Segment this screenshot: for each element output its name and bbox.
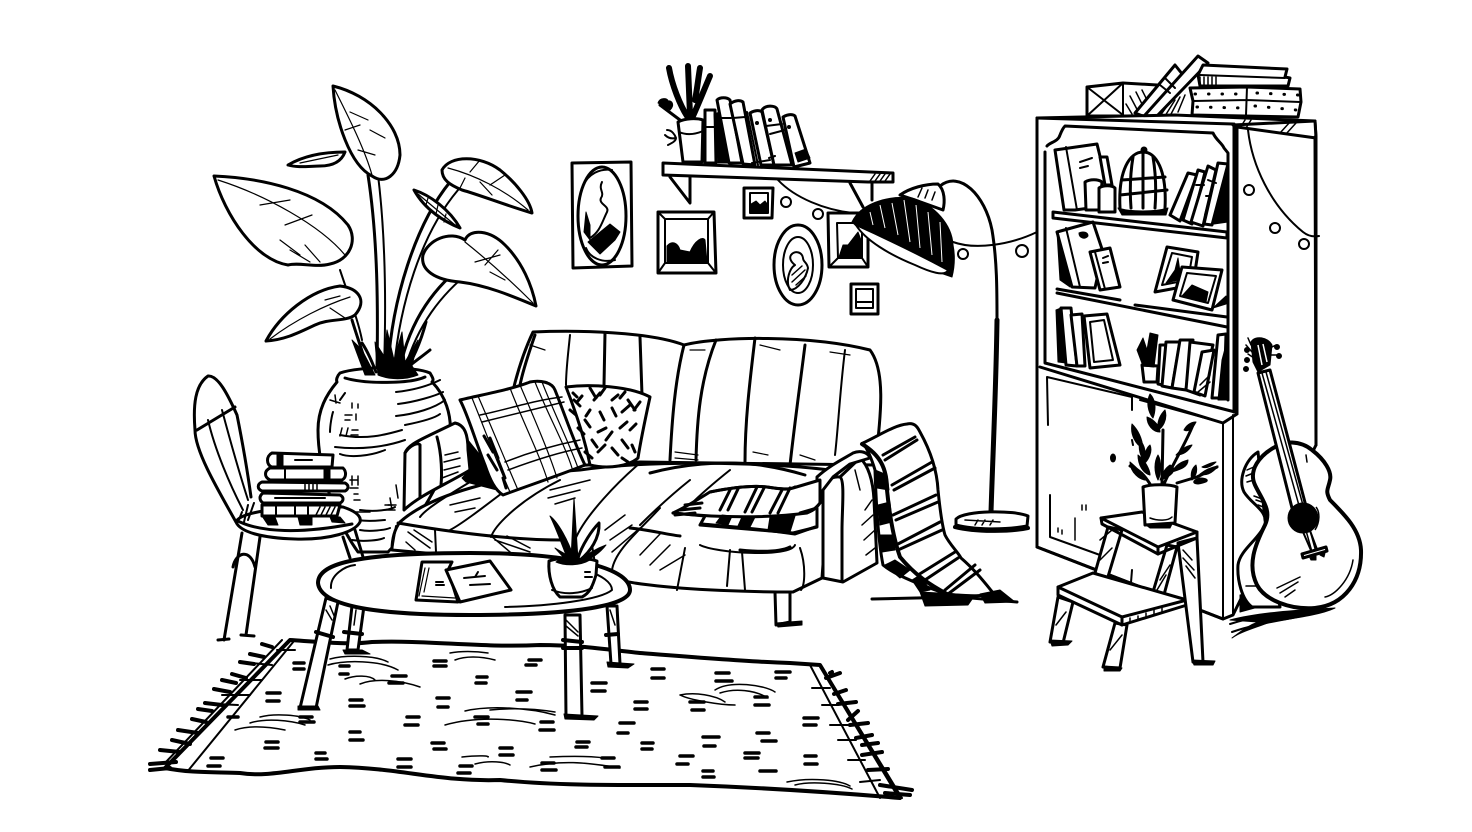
guitar side bbox=[1238, 452, 1280, 607]
potted plant bbox=[214, 86, 536, 552]
stool plant bbox=[1110, 394, 1218, 528]
leaf mid small bbox=[414, 190, 460, 228]
stool legs bbox=[1095, 527, 1122, 580]
string lights centre bbox=[953, 232, 1037, 246]
lamp cap bbox=[900, 184, 944, 210]
leaning books bbox=[1135, 65, 1183, 118]
picture: square landscape bbox=[658, 212, 716, 273]
guitar headstock bbox=[1251, 338, 1272, 372]
lamp shade bbox=[852, 197, 954, 277]
top shelf books bbox=[1055, 144, 1228, 226]
pillow chevron bbox=[566, 386, 650, 467]
table back legs bbox=[347, 606, 364, 650]
envelope box bbox=[1087, 83, 1157, 116]
items on top bbox=[1087, 56, 1301, 118]
picture: oval portrait bbox=[572, 162, 632, 268]
bird cage bbox=[1120, 152, 1167, 208]
stool top step bbox=[1101, 512, 1197, 547]
sofa backrest bbox=[500, 331, 881, 470]
guitar bbox=[1230, 338, 1361, 638]
lower shelf books bbox=[1056, 308, 1228, 400]
rug dots bbox=[208, 660, 818, 777]
throw blanket bbox=[862, 424, 1017, 606]
bookcase bbox=[1037, 56, 1319, 619]
shelf books bbox=[705, 98, 810, 167]
shelf board bbox=[663, 163, 893, 182]
shelves bbox=[1053, 212, 1227, 238]
stool lower step bbox=[1058, 573, 1187, 625]
coffee table bbox=[298, 498, 634, 720]
planter bbox=[318, 368, 450, 552]
dotted gift boxes bbox=[1190, 87, 1301, 117]
stacked books bbox=[1198, 65, 1290, 86]
guitar neck bbox=[1258, 370, 1307, 510]
chair bbox=[194, 376, 363, 640]
small potted plant on table bbox=[549, 498, 606, 597]
picture: tiny frame bbox=[851, 284, 878, 314]
leaf top bbox=[333, 86, 400, 179]
wall pictures bbox=[572, 162, 878, 314]
stack of books on chair bbox=[258, 453, 348, 525]
sofa seat bbox=[392, 463, 830, 592]
table front legs bbox=[300, 598, 338, 708]
open book on table bbox=[416, 561, 511, 602]
case body bbox=[1037, 115, 1316, 619]
leaf small bbox=[288, 152, 345, 167]
middle shelf books and frames bbox=[1057, 222, 1226, 310]
guitar sound hole bbox=[1288, 503, 1318, 533]
string lights left bbox=[778, 180, 853, 219]
case inner opening bbox=[1045, 126, 1235, 412]
sofa bbox=[384, 331, 1017, 627]
sofa leg bbox=[775, 592, 790, 625]
pillow plaid bbox=[460, 381, 585, 495]
guitar shadow bbox=[1230, 608, 1335, 638]
guitar bridge bbox=[1302, 547, 1327, 558]
picture: right frame bbox=[828, 213, 868, 267]
lamp pole bbox=[940, 181, 997, 320]
lamp base bbox=[956, 512, 1028, 529]
string lights right bbox=[1248, 130, 1319, 236]
rug bbox=[150, 640, 912, 798]
shelf plant bbox=[658, 66, 710, 162]
left arm bbox=[404, 423, 470, 510]
wall shelf bbox=[658, 66, 893, 207]
stool front leg bbox=[1178, 538, 1203, 662]
table top bbox=[318, 553, 630, 615]
leaf top right bbox=[442, 159, 532, 213]
grass blades bbox=[352, 322, 430, 379]
plant stems bbox=[352, 175, 468, 372]
picture: oval mirror bbox=[774, 225, 822, 305]
stool with plant bbox=[1050, 394, 1218, 671]
floor lamp bbox=[852, 181, 1037, 531]
guitar body bbox=[1252, 442, 1361, 608]
leaf right bbox=[423, 232, 536, 306]
shelf brackets bbox=[670, 177, 872, 207]
picture: small square bbox=[744, 188, 773, 218]
right arm bbox=[823, 458, 877, 582]
folded cloth on seat bbox=[673, 480, 820, 534]
lower section bbox=[1037, 367, 1237, 619]
leaf left large bbox=[214, 176, 352, 265]
leaf lower left bbox=[266, 286, 361, 341]
right books bbox=[1212, 165, 1228, 224]
